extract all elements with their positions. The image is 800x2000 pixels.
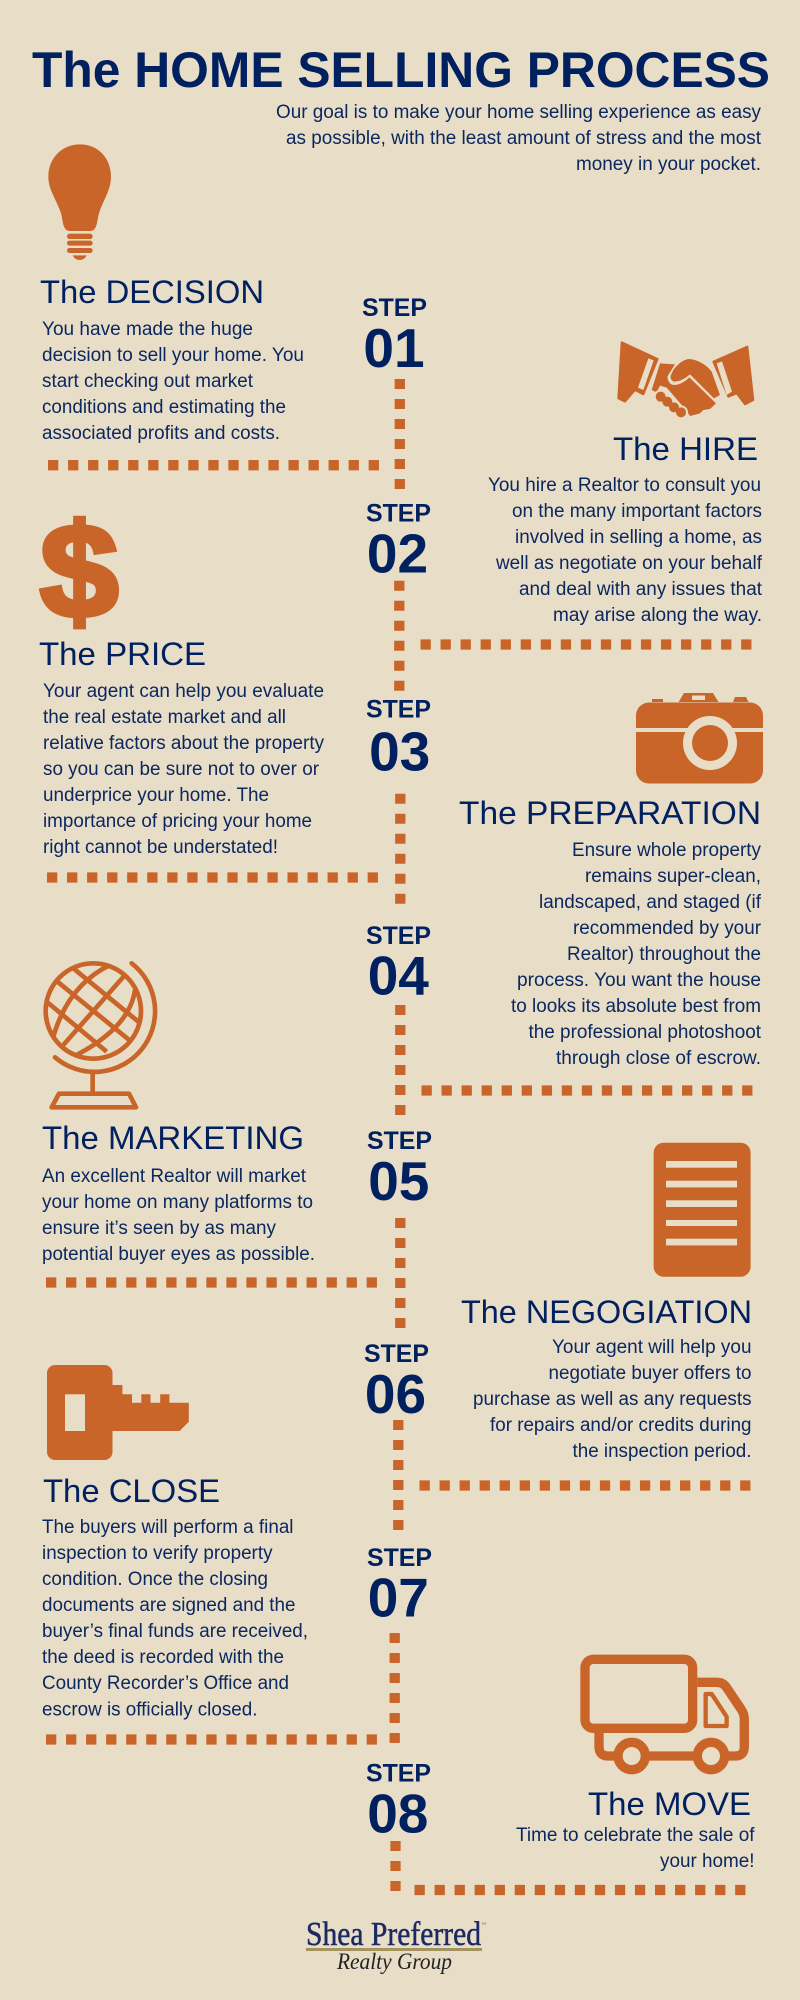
step 01 label xyxy=(362,295,427,379)
step 02 label: 02 xyxy=(367,523,428,585)
text: close description: escrow is officially closed. xyxy=(42,1700,258,1720)
text: close description xyxy=(42,1517,308,1720)
heading: the marketing: The MARKETING xyxy=(42,1120,304,1156)
step 05 label: 05 xyxy=(368,1150,429,1212)
step 06 label xyxy=(364,1341,429,1425)
step 07 label: 07 xyxy=(368,1567,429,1629)
step 02 label: STEP xyxy=(366,501,431,528)
text: decision description: start checking out market xyxy=(42,371,254,392)
icon: handshake xyxy=(618,342,753,419)
text: hire description: You hire a Realtor to consult you xyxy=(488,475,761,496)
text: price description: underprice your home. The xyxy=(43,785,269,806)
step 06 label: STEP xyxy=(364,1341,429,1368)
panel: the close xyxy=(42,1365,308,1720)
text: marketing description xyxy=(42,1166,315,1265)
heading: the hire: The HIRE xyxy=(613,431,758,467)
text: close description: buyer’s final funds are received, xyxy=(42,1621,308,1642)
text: hire description: on the many important factors xyxy=(512,501,762,522)
step 01 label: STEP xyxy=(362,295,427,322)
text: hire description: and deal with any issues that xyxy=(519,579,763,600)
text: preparation description: to looks its absolute best from xyxy=(511,996,761,1017)
text: marketing description: ensure it’s seen by as many xyxy=(42,1218,276,1239)
text: preparation description: remains super-clean, xyxy=(585,866,761,887)
text: decision description xyxy=(42,319,304,444)
connector: step 01 horizontal xyxy=(48,460,379,470)
panel: the price xyxy=(39,498,324,858)
heading: the move: The MOVE xyxy=(588,1786,751,1822)
icon: dollar sign: $ xyxy=(40,498,118,646)
text: hire description: well as negotiate on your behalf xyxy=(495,553,763,574)
connector: step 02 horizontal xyxy=(420,639,752,650)
step 07 label: STEP xyxy=(367,1545,432,1572)
connector: step 05 horizontal xyxy=(46,1277,377,1288)
text: preparation description: landscaped, and staged (if xyxy=(539,892,762,913)
step 07 label xyxy=(367,1545,432,1629)
connector: step 03 vertical xyxy=(395,794,405,904)
connector: step 04 horizontal xyxy=(422,1085,752,1096)
heading: the negogiation: The NEGOGIATION xyxy=(461,1294,752,1330)
connector: step 01 vertical xyxy=(395,379,405,489)
text: decision description: decision to sell your home. You xyxy=(42,345,304,366)
connector: step 07 vertical xyxy=(390,1633,400,1743)
connector: step 08 vertical xyxy=(390,1841,401,1891)
text: price description: the real estate market and all xyxy=(43,707,286,728)
text: price description: Your agent can help you evaluate xyxy=(43,681,324,702)
connector: step 06 horizontal xyxy=(420,1480,750,1491)
logo: Shea Preferred Realty Group: Shea Preferred xyxy=(306,1916,481,1953)
connector: step 08 horizontal xyxy=(414,1885,746,1895)
text: decision description: associated profits and costs. xyxy=(42,423,280,444)
panel: the negotiation xyxy=(461,1143,752,1462)
step 03 label: 03 xyxy=(369,721,430,783)
text: close description: condition. Once the closing xyxy=(42,1569,268,1590)
text: hire description: involved in selling a home, as xyxy=(515,527,762,548)
text: preparation description: recommended by your xyxy=(573,918,762,939)
step 03 label xyxy=(366,697,431,783)
text: preparation description: Realtor) throughout the xyxy=(567,944,761,965)
title: The HOME SELLING PROCESS xyxy=(32,42,770,98)
icon: light bulb xyxy=(48,144,111,260)
text: preparation description: process. You want the house xyxy=(517,970,761,991)
text: preparation description: through close of escrow. xyxy=(556,1048,761,1069)
text: close description: inspection to verify property xyxy=(42,1543,273,1564)
step 08 label: 08 xyxy=(367,1782,428,1844)
text: negotiation description: Your agent will help you xyxy=(552,1337,752,1358)
text: price description: right cannot be understated! xyxy=(43,837,278,858)
text: price description: relative factors about the property xyxy=(43,733,324,754)
text: negotiation description: purchase as well as any requests xyxy=(473,1389,752,1410)
text: price description: so you can be sure not to over or xyxy=(43,759,320,780)
connector: step 03 horizontal xyxy=(47,872,378,883)
text: preparation description: Ensure whole property xyxy=(572,840,761,861)
heading: the close: The CLOSE xyxy=(43,1473,220,1509)
text: negotiation description: the inspection period. xyxy=(572,1441,752,1462)
text: marketing description: potential buyer eyes as possible. xyxy=(42,1244,315,1265)
intro text xyxy=(276,102,762,175)
heading: the preparation: The PREPARATION xyxy=(459,795,761,831)
panel: the decision xyxy=(40,144,304,444)
heading: the decision: The DECISION xyxy=(40,274,264,310)
icon: document xyxy=(654,1143,751,1277)
panel: the preparation xyxy=(459,693,763,1069)
intro text: as possible, with the least amount of stress and the most xyxy=(286,128,762,149)
text: hire description xyxy=(488,475,763,626)
text: move description: Time to celebrate the sale of xyxy=(516,1825,755,1846)
text: hire description: may arise along the way. xyxy=(553,605,762,626)
step 05 label: STEP xyxy=(367,1128,432,1155)
text: preparation description: the professional photoshoot xyxy=(528,1022,762,1043)
text: move description xyxy=(516,1825,755,1872)
text: preparation description xyxy=(511,840,762,1069)
connector: step 06 vertical xyxy=(393,1420,403,1530)
panel: the marketing xyxy=(42,963,315,1265)
icon: camera xyxy=(636,693,763,784)
text: negotiation description xyxy=(473,1337,752,1462)
text: price description xyxy=(43,681,324,858)
icon: key xyxy=(47,1365,189,1460)
connector: step 02 vertical xyxy=(394,581,404,691)
text: marketing description: An excellent Realtor will market xyxy=(42,1166,307,1187)
step 03 label: STEP xyxy=(366,697,431,724)
text: move description: your home! xyxy=(660,1851,754,1872)
panel: the hire xyxy=(488,342,763,626)
logo: Shea Preferred Realty Group xyxy=(306,1916,486,1974)
text: decision description: You have made the huge xyxy=(42,319,253,340)
connector: step 05 vertical xyxy=(395,1218,405,1328)
text: decision description: conditions and estimating the xyxy=(42,397,286,418)
step 08 label: STEP xyxy=(366,1761,431,1788)
icon: globe xyxy=(46,963,155,1107)
text: price description: importance of pricing your home xyxy=(43,811,312,832)
text: negotiation description: negotiate buyer offers to xyxy=(548,1363,752,1384)
text: close description: The buyers will perform a final xyxy=(42,1517,294,1538)
text: close description: the deed is recorded with the xyxy=(42,1647,284,1668)
step 06 label: 06 xyxy=(365,1363,426,1425)
step 05 label xyxy=(367,1128,432,1212)
text: marketing description: your home on many platforms to xyxy=(42,1192,313,1213)
step 02 label xyxy=(366,501,431,585)
icon: moving truck xyxy=(585,1659,744,1770)
text: close description: County Recorder’s Office and xyxy=(42,1673,289,1694)
connector: step 07 horizontal xyxy=(46,1734,377,1745)
intro text: Our goal is to make your home selling experience as easy xyxy=(276,102,761,123)
logo: Shea Preferred Realty Group: ™ xyxy=(481,1922,486,1928)
logo: Shea Preferred Realty Group: Realty Group xyxy=(336,1949,452,1974)
step 04 label: STEP xyxy=(366,923,431,950)
step 01 label: 01 xyxy=(363,317,425,379)
step 04 label: 04 xyxy=(368,944,429,1006)
text: negotiation description: for repairs and/or credits during xyxy=(490,1415,752,1436)
step 08 label xyxy=(366,1761,431,1844)
heading: the price: The PRICE xyxy=(39,636,206,672)
panel: the move xyxy=(516,1659,755,1872)
intro text: money in your pocket. xyxy=(576,154,761,175)
text: close description: documents are signed and the xyxy=(42,1595,296,1616)
connector: step 04 vertical xyxy=(395,1005,405,1115)
